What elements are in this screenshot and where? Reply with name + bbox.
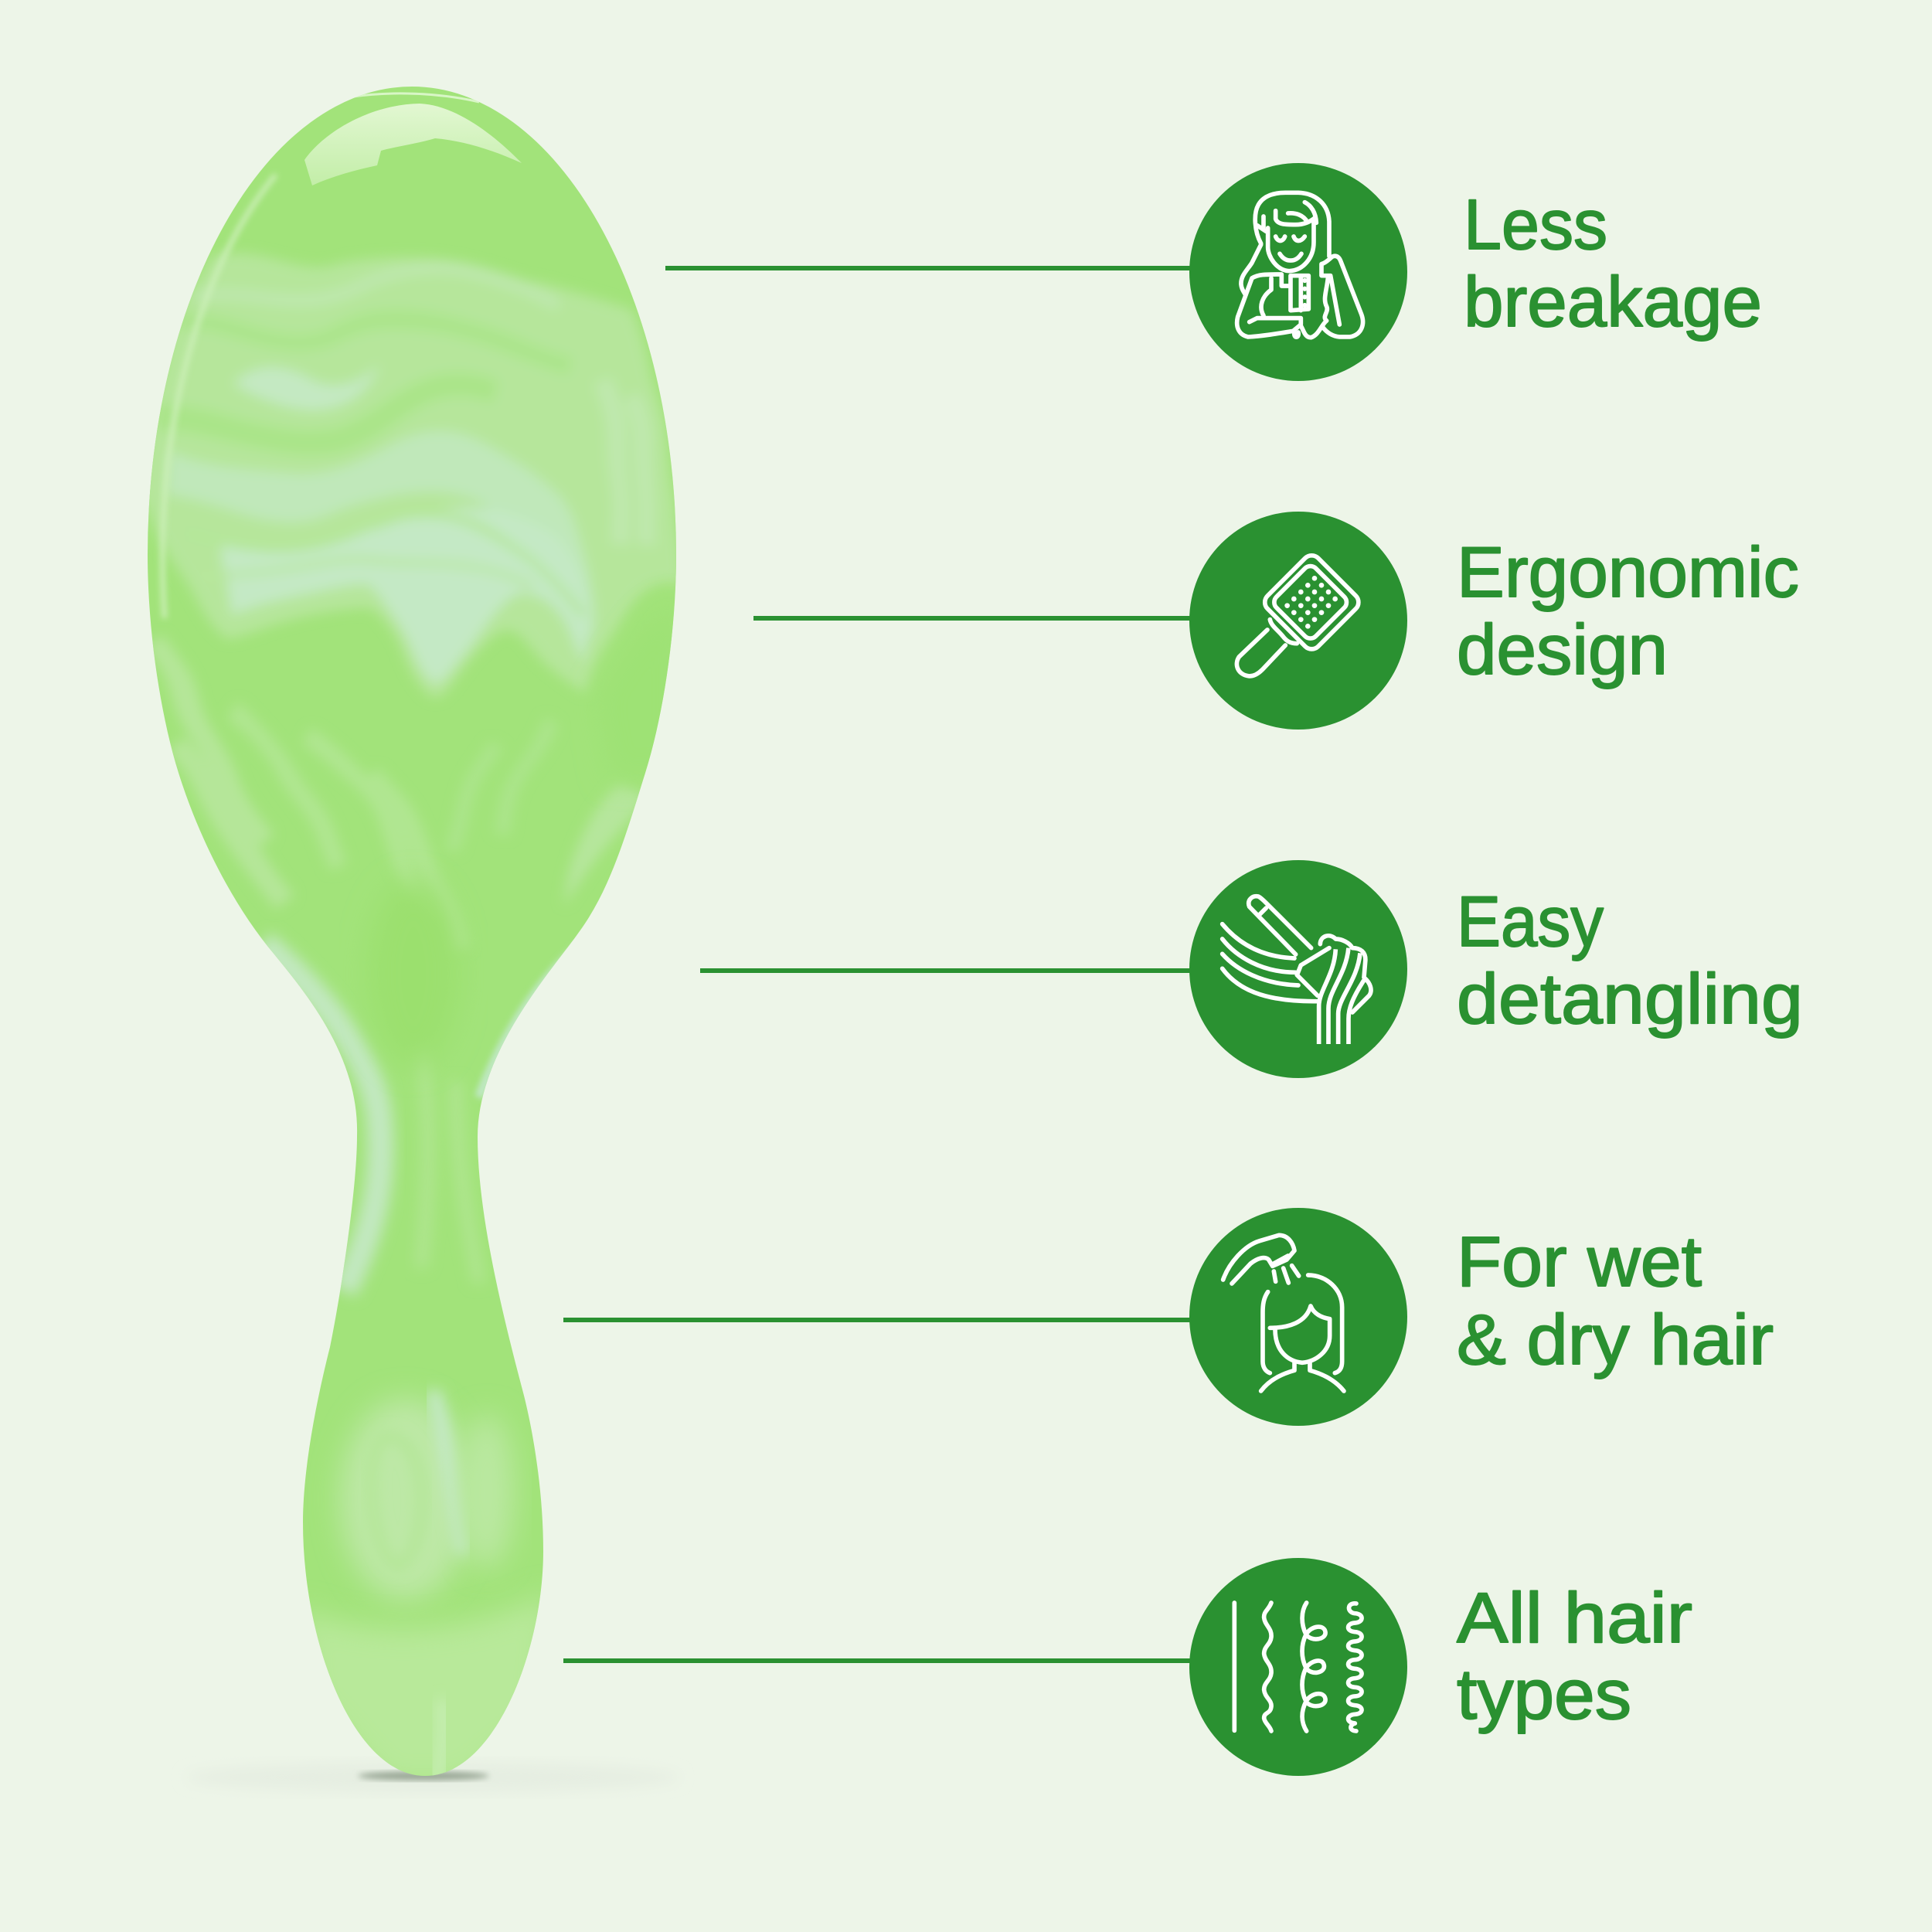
feature: easy detangling xyxy=(700,860,1803,1078)
label: easy detangling xyxy=(1457,883,1803,1039)
glossy rim and highlight xyxy=(162,94,522,618)
label: easy detangling: detangling xyxy=(1457,960,1803,1039)
label: all hair types xyxy=(1457,1579,1692,1734)
label: all hair types: All hair xyxy=(1457,1579,1692,1658)
feature: ergonomic design xyxy=(753,512,1799,730)
marble bands: head xyxy=(139,251,684,951)
label: for wet and dry hair: & dry hair xyxy=(1457,1301,1774,1379)
icon: shower over woman's head xyxy=(1223,1235,1344,1391)
icon: woman brushing hair xyxy=(1237,192,1363,338)
illustration: green marbled hair brush xyxy=(139,77,688,1785)
label: all hair types: types xyxy=(1457,1655,1631,1734)
label: ergonomic design: design xyxy=(1457,611,1668,689)
marble bands: neck and handle xyxy=(263,603,680,1785)
label: for wet and dry hair: For wet xyxy=(1457,1223,1702,1301)
icon: straight, wavy, curly and coily hair xyxy=(1234,1603,1362,1731)
label: less breakage: breakage xyxy=(1464,263,1762,342)
feature: for wet and dry hair xyxy=(563,1208,1774,1426)
icon: paddle brush xyxy=(1236,552,1362,676)
infographic canvas xyxy=(148,87,1799,1782)
label: for wet and dry hair xyxy=(1457,1223,1774,1379)
label: easy detangling: Easy xyxy=(1457,883,1604,961)
label: less breakage xyxy=(1464,185,1762,342)
brush shadow xyxy=(185,1762,680,1793)
icon: hand detangling hair with comb xyxy=(1223,896,1371,1044)
label: less breakage: Less xyxy=(1464,185,1607,264)
feature: less breakage xyxy=(665,163,1762,381)
label: ergonomic design xyxy=(1457,533,1799,689)
feature: all hair types xyxy=(563,1558,1692,1776)
label: ergonomic design: Ergonomic xyxy=(1457,533,1799,612)
